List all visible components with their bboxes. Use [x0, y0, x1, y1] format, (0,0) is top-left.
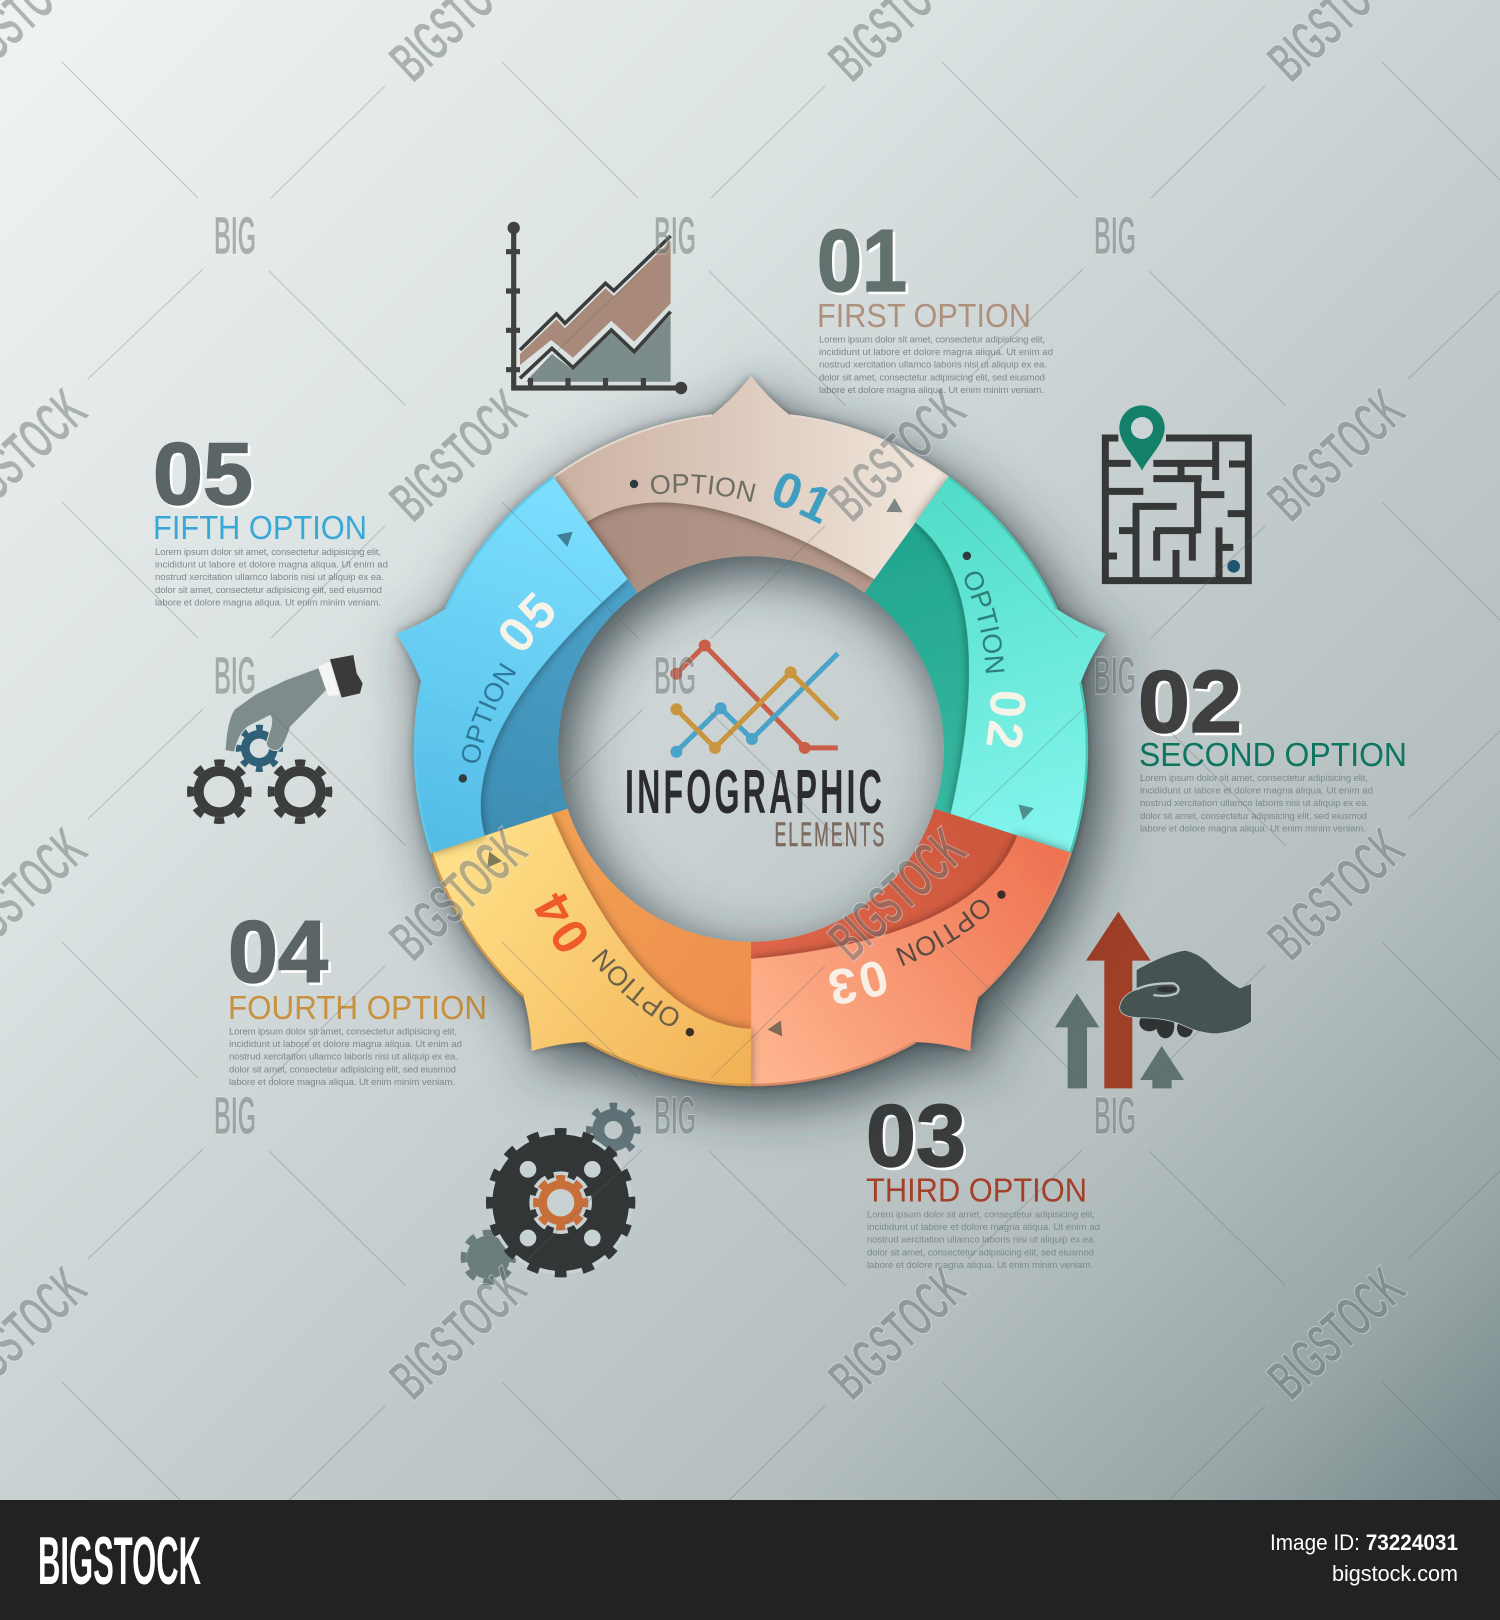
- footer image id: Image ID: 73224031: [1270, 1530, 1458, 1555]
- text block: first option: nostrud xercitation ullamco laboris nisi ut aliquip ex ea.: [819, 360, 1047, 371]
- text block: third option: Lorem ipsum dolor sit amet, consectetur adipisicing elit,: [867, 1210, 1095, 1220]
- icon: line chart with areas: [506, 222, 687, 394]
- segment: option 02: [848, 464, 1148, 900]
- text block: fifth option: dolor sit amet, consectetur adipisicing elit, sed eiusmod: [155, 585, 382, 596]
- text block: first option: dolor sit amet, consectetur adipisicing elit, sed eiusmod: [819, 372, 1045, 383]
- segment: option 05: OPTION: [462, 662, 516, 763]
- footer site: bigstock.com: [1332, 1561, 1458, 1586]
- center title: INFOGRAPHIC: [625, 758, 885, 827]
- text block: third option: nostrud xercitation ullamco laboris nisi ut aliquip ex ea.: [867, 1235, 1096, 1246]
- text block: second option: labore et dolore magna aliqua. Ut enim minim veniam.: [1140, 823, 1366, 834]
- text block: fourth option: nostrud xercitation ullamco laboris nisi ut aliquip ex ea.: [229, 1052, 458, 1063]
- watermark: BIG repeated: [214, 206, 1136, 1146]
- text block: fifth option: 05: [153, 424, 253, 523]
- watermark: BIGSTOCK repeated: BIGSTOCK: [817, 816, 978, 973]
- text block: second option: [1138, 652, 1407, 834]
- text block: second option: Lorem ipsum dolor sit amet, consectetur adipisicing elit,: [1140, 773, 1368, 784]
- text block: fourth option: [228, 902, 487, 1088]
- text block: fourth option: incididunt ut labore et dolore magna aliqua. Ut enim ad: [229, 1039, 462, 1050]
- text block: third option: THIRD OPTION: [866, 1172, 1087, 1208]
- icon: maze with location pin: [1105, 405, 1248, 581]
- text block: fourth option: dolor sit amet, consectetur adipisicing elit, sed eiusmod: [229, 1064, 456, 1075]
- segment: option 02: 02: [986, 692, 1026, 748]
- segment: option 03: 03: [829, 962, 886, 1004]
- watermark: BIGSTOCK repeated: BIGSTOCK: [817, 1255, 978, 1412]
- center subtitle: ELEMENTS: [774, 815, 886, 854]
- footer bar: BIGSTOCK: [38, 1523, 201, 1599]
- segment: option 04: OPTION: [592, 948, 679, 1026]
- text block: second option: nostrud xercitation ullamco laboris nisi ut aliquip ex ea.: [1140, 798, 1369, 809]
- ring diagram: [378, 364, 1148, 1144]
- text block: fourth option: labore et dolore magna aliqua. Ut enim minim veniam.: [229, 1077, 455, 1088]
- text: BIG: [1094, 206, 1136, 266]
- watermark: BIG repeated: BIG: [214, 646, 256, 706]
- icon: hand placing gear: [190, 655, 363, 821]
- watermark: BIG repeated: BIG: [654, 206, 696, 266]
- text block: fifth option: [153, 424, 388, 608]
- icon: hand lifting arrows: [1055, 912, 1251, 1088]
- segment: option 05: 05: [500, 592, 554, 650]
- watermark: BIG repeated: BIG: [654, 1086, 696, 1146]
- segment: option 01: [538, 364, 989, 633]
- text block: first option: 01: [817, 211, 907, 310]
- footer bar: [0, 1500, 1500, 1620]
- text: BIG: [1094, 1086, 1136, 1146]
- segment: option 04: 04: [534, 892, 587, 952]
- text block: third option: [866, 1086, 1100, 1271]
- segment: option 01: 01: [774, 473, 828, 524]
- icon: gears: [464, 1106, 637, 1282]
- center icon: crossing line chart: [670, 640, 838, 758]
- watermark: BIGSTOCK repeated: BIGSTOCK: [378, 1255, 539, 1412]
- text block: fifth option: labore et dolore magna aliqua. Ut enim minim veniam.: [155, 597, 381, 608]
- watermark: BIG repeated: BIG: [214, 206, 256, 266]
- segment: option 02: OPTION: [964, 572, 1004, 673]
- segment: option 05: [378, 462, 680, 899]
- text block: second option: 02: [1138, 652, 1242, 751]
- text: BIG: [1094, 646, 1136, 706]
- text block: third option: 03: [866, 1086, 966, 1185]
- text block: second option: incididunt ut labore et dolore magna aliqua. Ut enim ad: [1140, 786, 1373, 797]
- text block: fourth option: Lorem ipsum dolor sit amet, consectetur adipisicing elit,: [229, 1026, 457, 1038]
- text block: fifth option: FIFTH OPTION: [153, 509, 367, 546]
- text block: fifth option: incididunt ut labore et dolore magna aliqua. Ut enim ad: [155, 560, 388, 571]
- text block: third option: dolor sit amet, consectetur adipisicing elit, sed eiusmod: [867, 1247, 1094, 1258]
- text block: third option: incididunt ut labore et dolore magna aliqua. Ut enim ad: [867, 1222, 1100, 1233]
- segment: option 03: [727, 798, 1116, 1142]
- watermark: BIG repeated: BIG: [654, 646, 696, 706]
- text block: second option: SECOND OPTION: [1139, 736, 1407, 773]
- text block: fifth option: Lorem ipsum dolor sit amet, consectetur adipisicing elit,: [155, 547, 381, 558]
- text block: first option: [817, 211, 1053, 396]
- text block: first option: incididunt ut labore et dolore magna aliqua. Ut enim ad: [819, 347, 1053, 358]
- watermark: BIGSTOCK repeated: BIGSTOCK: [817, 377, 978, 534]
- text block: first option: FIRST OPTION: [817, 297, 1031, 334]
- segment: option 01: OPTION: [651, 474, 756, 502]
- watermark: BIG repeated: BIG: [214, 1086, 256, 1146]
- watermark: BIGSTOCK repeated: BIGSTOCK: [378, 377, 539, 534]
- segment: option 03: OPTION: [896, 900, 990, 966]
- text block: first option: labore et dolore magna aliqua. Ut enim minim veniam.: [819, 385, 1044, 396]
- text block: fourth option: 04: [228, 902, 328, 1001]
- text block: second option: dolor sit amet, consectetur adipisicing elit, sed eiusmod: [1140, 811, 1367, 822]
- segment: option 04: [410, 792, 838, 1142]
- text block: fourth option: FOURTH OPTION: [228, 989, 487, 1026]
- text block: fifth option: nostrud xercitation ullamco laboris nisi ut aliquip ex ea.: [155, 572, 384, 583]
- text block: first option: Lorem ipsum dolor sit amet, consectetur adipisicing elit,: [819, 334, 1045, 346]
- watermark: BIGSTOCK repeated: BIGSTOCK: [378, 816, 539, 973]
- text block: third option: labore et dolore magna aliqua. Ut enim minim veniam.: [867, 1260, 1093, 1271]
